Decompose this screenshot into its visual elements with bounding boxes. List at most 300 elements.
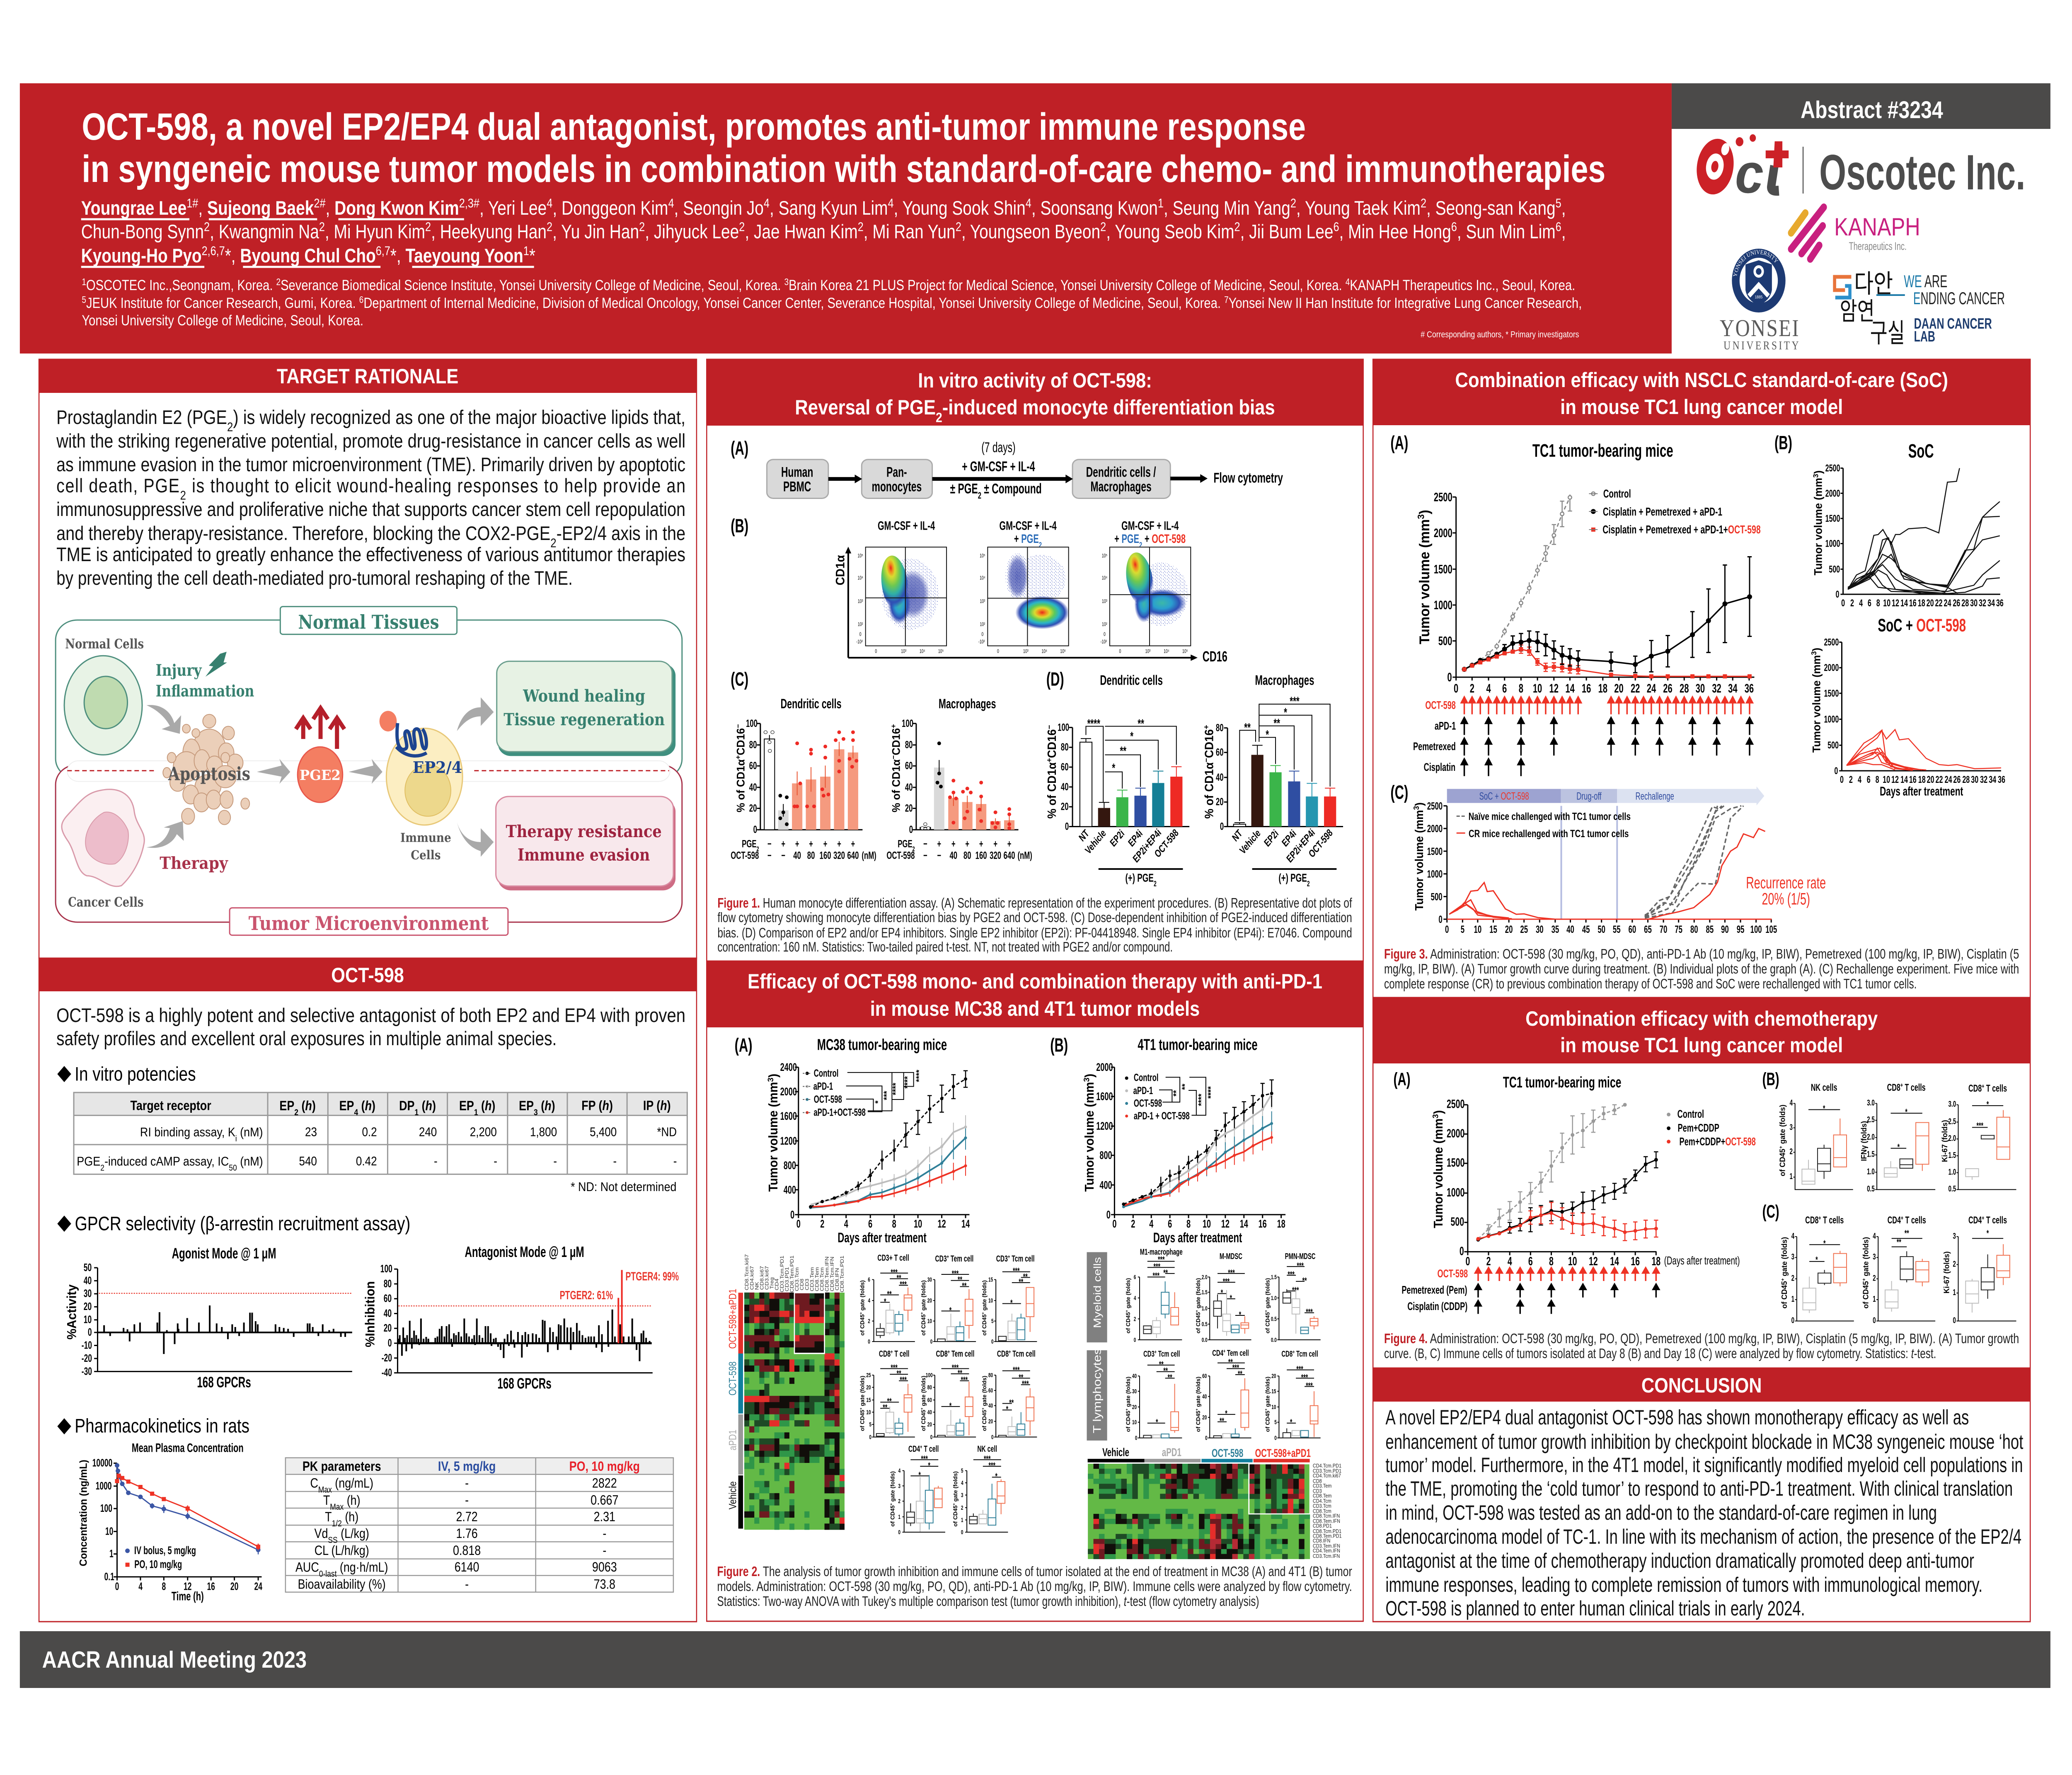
bar chart: inhibitor comparison macrophages: Macrophages bbox=[1255, 673, 1314, 688]
box plot: M-MDSC: of CD45+ gate (folds) bbox=[1195, 1278, 1201, 1333]
bar chart: inhibitor comparison macrophages: 80 bbox=[1216, 722, 1224, 734]
heatmap legend: 4T1 groups: OCT-598+aPD1 bbox=[1255, 1447, 1311, 1460]
heatmap labels: 4T1: CD8 bbox=[1313, 1478, 1322, 1484]
footer: AACR Annual Meeting 2023 bbox=[42, 1647, 307, 1673]
line chart: SoC individual: 36 bbox=[1996, 598, 2004, 609]
box plot: NK cells bbox=[1778, 1082, 1853, 1189]
timeline banner and rechallenge chart: Tumor volume (mm3) bbox=[1412, 802, 1426, 911]
flow cytometry plots: 10⁵ bbox=[938, 649, 944, 654]
bar chart: inhibitor comparison macrophages: Vehicle bbox=[1237, 827, 1263, 857]
table: PK parameters: 1.76 bbox=[456, 1526, 478, 1541]
caption: figure 1 bbox=[717, 896, 1352, 955]
timeline banner and rechallenge chart: 1500 bbox=[1427, 846, 1443, 857]
table: in vitro potencies: - bbox=[553, 1154, 557, 1169]
caption: figure 1: Figure 1. Human monocyte differentiation assay. (A) Schematic representation of the experiment procedures. (B) Representative dot plots of bbox=[717, 896, 1352, 911]
box plot: IFNγ CD8+ T cells: 2.5 bbox=[1867, 1115, 1875, 1124]
bar chart: inhibitor comparison dendritic cells bbox=[1045, 669, 1189, 888]
bar chart: inhibitor comparison macrophages: EP2i bbox=[1262, 827, 1280, 849]
arrows: dosing schedule: aPD-1 bbox=[1435, 719, 1456, 732]
header banner bbox=[20, 83, 1672, 354]
heading: target rationale: TARGET RATIONALE bbox=[277, 365, 458, 388]
text: therapy: Therapy bbox=[160, 853, 228, 873]
heatmap labels: 4T1: CD4.Tem.IFN bbox=[1313, 1547, 1340, 1554]
box plot: Ki-67 CD8+ T cells: 1.5 bbox=[1949, 1150, 1956, 1160]
schematic: experiment flow: Pan- bbox=[886, 465, 907, 480]
box plot: CD8+ Tcm cell: *** bbox=[1306, 1381, 1313, 1390]
schematic: experiment flow: + GM-CSF + IL-4 bbox=[962, 459, 1035, 475]
line chart: MC38 tumor volume: MC38 tumor-bearing mice bbox=[817, 1036, 947, 1053]
heatmap labels: 4T1: CD8.Tcm bbox=[1313, 1508, 1331, 1514]
flow cytometry plots: 10² bbox=[858, 622, 863, 627]
caption: figure 3: complete response (CR) to previous combination therapy of OCT-598 and SoC were rechallenged with TC1 tumor cells. bbox=[1384, 976, 1917, 992]
table: PK parameters: 73.8 bbox=[594, 1577, 615, 1592]
table: in vitro potencies: EP1 (h) bbox=[459, 1099, 495, 1117]
bar chart: agonist mode: %Activity bbox=[65, 1284, 79, 1339]
bar chart: antagonist mode: 40 bbox=[384, 1307, 392, 1319]
heading: efficacy bbox=[748, 970, 1322, 1020]
text: injury inflammation: Injury bbox=[156, 661, 202, 680]
line chart: SoC + OCT-598 individual: 8 bbox=[1876, 774, 1879, 785]
line chart: TC1 chemotherapy: 2000 bbox=[1447, 1127, 1464, 1140]
line chart: 4T1 tumor volume: 1200 bbox=[1096, 1120, 1113, 1132]
flow cytometry plots: + PGE2 + OCT-598 bbox=[1114, 532, 1186, 550]
box plot: CD8+ Tem cell: CD8+ Tem cell bbox=[936, 1349, 974, 1358]
line chart: MC38 tumor volume: Tumor volume (mm3) bbox=[766, 1074, 780, 1192]
box plot: CD3+ T cell: ** bbox=[897, 1273, 901, 1283]
timeline banner and rechallenge chart: 105 bbox=[1765, 924, 1777, 935]
heading: in vitro activity: In vitro activity of OCT-598: bbox=[918, 369, 1152, 392]
bar chart: antagonist mode: %Inhibition bbox=[363, 1281, 378, 1347]
line chart: TC1 tumor growth: 16 bbox=[1582, 682, 1591, 695]
flow cytometry plots: 10⁴ bbox=[1164, 649, 1169, 654]
heatmap labels: 4T1: CD8.Tem bbox=[1313, 1493, 1331, 1499]
box plot: CD4+ T cell: *** bbox=[921, 1454, 928, 1464]
box plot: NK cell: 0 bbox=[961, 1528, 963, 1535]
text block: rationale paragraph: TME is anticipated to greatly enhance the effectiveness of various antitumor therapies bbox=[56, 544, 685, 566]
heatmap labels: 4T1: CD8.Tem.PD1 bbox=[1313, 1533, 1342, 1539]
table: PK parameters: - bbox=[603, 1543, 606, 1558]
timeline banner and rechallenge chart: 20% (1/5) bbox=[1762, 890, 1810, 908]
box plot: CD8+ Tcm cell bbox=[981, 1349, 1037, 1441]
table: in vitro potencies: - bbox=[673, 1154, 677, 1169]
box plot: Ki-67 CD4+ T cells: * bbox=[1987, 1228, 1989, 1238]
heatmap labels: MC38: CD3.PD1 bbox=[784, 1267, 790, 1291]
box plot: PMN-MDSC: ** bbox=[1302, 1276, 1307, 1285]
timeline banner and rechallenge chart: 35 bbox=[1552, 924, 1559, 935]
flow cytometry plots: 10³ bbox=[1023, 649, 1029, 654]
line chart: TC1 chemotherapy: 1000 bbox=[1447, 1186, 1464, 1199]
box plot: CD8+ T cells: 3 bbox=[1791, 1252, 1794, 1262]
box plot: CD8+ T cells bbox=[1780, 1214, 1854, 1325]
line chart: TC1 tumor growth: (A) bbox=[1390, 433, 1408, 453]
label: T lymphocytes: T lymphocytes bbox=[1091, 1348, 1104, 1434]
box plot: CD3+ Tcm cell: 10 bbox=[988, 1297, 993, 1304]
box plot: PMN-MDSC: PMN-MDSC bbox=[1285, 1252, 1315, 1261]
box plot: CD8+ Tcm cell: ** bbox=[1019, 1373, 1023, 1382]
box plot: CD3+ Tem cell: CD3+ Tem cell bbox=[935, 1254, 973, 1264]
authors: Kyoung-Ho Pyo2,6,7*, Byoung Chul Cho6,7*, Taeyoung Yoon1* bbox=[81, 244, 535, 267]
box plot: M1-macrophage: 4 bbox=[1134, 1294, 1136, 1301]
line chart: TC1 chemotherapy: 0 bbox=[1465, 1255, 1470, 1268]
schematic: experiment flow: Human bbox=[781, 465, 813, 480]
box plot: PMN-MDSC: 0.0 bbox=[1271, 1336, 1277, 1343]
box plot: Ki-67 CD8+ T cells: 1.0 bbox=[1949, 1167, 1956, 1177]
line chart: 4T1 tumor volume: 14 bbox=[1240, 1217, 1248, 1230]
timeline banner and rechallenge chart: 90 bbox=[1721, 924, 1729, 935]
line chart: MC38 tumor volume: *** bbox=[882, 1091, 891, 1100]
box plot: CD3+ Tcm cell: 5 bbox=[991, 1317, 994, 1325]
line chart: TC1 tumor growth: 2 bbox=[1470, 682, 1474, 695]
line chart: mean plasma concentration: 24 bbox=[254, 1580, 262, 1593]
box plot: M1-macrophage: *** bbox=[1158, 1254, 1165, 1264]
dot plot: PGE2 + OCT-598 bbox=[1110, 547, 1191, 646]
box plot: CD3+ T cell: *** bbox=[900, 1279, 907, 1289]
line chart: MC38 tumor volume: (A) bbox=[735, 1035, 753, 1056]
line chart: SoC + OCT-598 individual: Days after treatment bbox=[1880, 784, 1963, 799]
line chart: TC1 tumor growth: 36 bbox=[1745, 682, 1754, 695]
bar chart: dose dependence macrophages: + bbox=[1007, 838, 1011, 850]
table: in vitro potencies: FP (h) bbox=[581, 1098, 613, 1113]
line chart: TC1 chemotherapy: Control bbox=[1677, 1108, 1704, 1120]
box plot: PMN-MDSC: *** bbox=[1297, 1261, 1304, 1271]
box plot: CD8+ T cell: *** bbox=[891, 1363, 898, 1373]
bar chart: antagonist mode bbox=[363, 1244, 679, 1392]
table: in vitro potencies: DP1 (h) bbox=[399, 1099, 436, 1117]
table: in vitro potencies: 2,200 bbox=[470, 1125, 497, 1139]
box plot: CD8+ T cells: 2 bbox=[1791, 1274, 1794, 1283]
box plot: NK cell: 4 bbox=[961, 1479, 963, 1487]
line chart: mean plasma concentration: 8 bbox=[162, 1580, 166, 1593]
schematic: experiment flow: monocytes bbox=[872, 479, 922, 495]
heatmap labels: MC38: aPD1 bbox=[727, 1430, 738, 1451]
line chart: MC38 tumor volume: 0 bbox=[790, 1208, 794, 1221]
line chart: mean plasma concentration: 16 bbox=[207, 1580, 215, 1593]
box plot: CD8+ Tem cell bbox=[920, 1349, 976, 1441]
bar chart: inhibitor comparison macrophages: 0 bbox=[1220, 821, 1224, 832]
bar chart: dose dependence dendritic cells: − bbox=[767, 838, 772, 850]
caption: figure 2: Statistics: Two-way ANOVA with Tukey's multiple comparison test (tumor growth inhibition), t-test (flow cytometry analysis) bbox=[717, 1594, 1259, 1609]
box plot: CD8+ Tcm cell: 10 bbox=[1271, 1403, 1276, 1410]
line chart: SoC + OCT-598 individual: 22 bbox=[1936, 774, 1943, 785]
line chart: SoC individual: 26 bbox=[1953, 598, 1960, 609]
text block: conclusion: in mind, OCT-598 was tested as an add-on to the standard-of-care regimen in lung bbox=[1385, 1501, 1937, 1524]
line chart: SoC + OCT-598 individual: 34 bbox=[1989, 774, 1997, 785]
heatmap labels: 4T1 bbox=[1313, 1463, 1342, 1559]
box plot: CD3+ T cell: of CD45+ gate (folds) bbox=[859, 1280, 866, 1336]
box plot: CD8+ Tem cell: *** bbox=[952, 1363, 959, 1373]
box plot: Ki-67 CD4+ T cells: 3 bbox=[1953, 1231, 1956, 1241]
box plot: CD8+ T cell: 15 bbox=[866, 1396, 871, 1404]
line chart: SoC individual: 28 bbox=[1961, 598, 1969, 609]
line chart: 4T1 tumor volume: 4 bbox=[1149, 1217, 1153, 1230]
schematic: experiment flow: Flow cytometry bbox=[1213, 470, 1283, 486]
line chart: SoC individual: 6 bbox=[1868, 598, 1871, 609]
timeline banner and rechallenge chart: 10 bbox=[1474, 924, 1481, 935]
bar chart: agonist mode: 30 bbox=[84, 1287, 92, 1300]
text block: rationale paragraph: immunosuppressive and proliferative niche that supports cancer stem cell repopulation bbox=[56, 499, 685, 521]
heatmap labels: 4T1: CD3.Tem bbox=[1313, 1482, 1331, 1489]
timeline banner and rechallenge chart: CR mice rechallenged with TC1 tumor cells bbox=[1469, 828, 1629, 840]
text block: conclusion: A novel EP2/EP4 dual antagonist OCT-598 has shown monotherapy efficacy as well as bbox=[1385, 1406, 1969, 1429]
text block: rationale paragraph: with the striking regenerative potential, promote drug-resistance in cancer cells as well bbox=[56, 431, 685, 452]
line chart: mean plasma concentration: 10 bbox=[105, 1525, 113, 1537]
box plot: CD8+ T cell: ** bbox=[887, 1396, 892, 1406]
box plot: Ki-67 CD4+ T cells bbox=[1942, 1214, 2016, 1325]
line chart: SoC individual: 0 bbox=[1836, 589, 1840, 600]
heatmap labels: 4T1: CD8.Tcm.PD1 bbox=[1313, 1528, 1341, 1534]
timeline banner and rechallenge chart: 2000 bbox=[1427, 823, 1443, 835]
box plot: CD3+ Tcm cell bbox=[981, 1254, 1037, 1345]
icon: immune cell with EP2/4 receptor: Cells bbox=[411, 848, 441, 862]
heatmap labels: MC38: OCT-598+aPD1 bbox=[727, 1289, 738, 1349]
line chart: SoC individual: 24 bbox=[1944, 598, 1951, 609]
box plot: Ki-67 CD8+ T cells: 2.0 bbox=[1949, 1133, 1956, 1143]
box plot: CD8+ Tcm cell: 5 bbox=[1274, 1419, 1277, 1426]
box plot: CD8+ Tcm cell: *** bbox=[1296, 1364, 1303, 1374]
box plot: M-MDSC: 1.5 bbox=[1202, 1288, 1208, 1296]
box plot: CD3+ Tcm cell: CD3+ Tcm cell bbox=[1143, 1349, 1180, 1358]
box plot: M1-macrophage: 2 bbox=[1134, 1315, 1136, 1322]
heatmap labels: MC38: Vehicle bbox=[727, 1481, 738, 1509]
line chart: MC38 tumor volume: 8 bbox=[892, 1217, 896, 1230]
text block: conclusion: immune responses, leading to complete remission of tumors with immunological memory. bbox=[1385, 1573, 1982, 1596]
bar chart: inhibitor comparison macrophages: 40 bbox=[1216, 772, 1224, 783]
bar chart: dose dependence macrophages: 40 bbox=[949, 850, 957, 861]
box: wound healing bbox=[497, 661, 675, 756]
heatmap labels: 4T1: CD4.Tcm bbox=[1313, 1498, 1331, 1504]
heatmap labels: 4T1: CD4.Tcm.ki67 bbox=[1313, 1472, 1341, 1479]
panel: conclusion bbox=[1373, 1368, 2030, 1622]
line chart: 4T1 tumor volume: **** bbox=[1206, 1086, 1216, 1099]
authors bbox=[81, 196, 1566, 267]
line chart: TC1 chemotherapy: Pem+CDDP bbox=[1678, 1121, 1719, 1134]
bar chart: dose dependence macrophages: 40 bbox=[905, 782, 913, 793]
panel: target rationale bbox=[39, 359, 697, 958]
box plot: CD3+ Tem cell: ** bbox=[958, 1275, 962, 1284]
line chart: TC1 chemotherapy: (A) bbox=[1394, 1069, 1411, 1089]
box plot: NK cells: 3 bbox=[1790, 1123, 1793, 1132]
line chart: TC1 tumor growth: 22 bbox=[1631, 682, 1640, 695]
bar chart: inhibitor comparison macrophages: *** bbox=[1290, 695, 1300, 708]
logo: Daan Cancer Lab: DAAN CANCER bbox=[1914, 316, 1992, 332]
box plot: CD8+ Tcm cell: CD8+ Tcm cell bbox=[1281, 1349, 1318, 1358]
panel: efficacy MC38 and 4T1 bbox=[707, 961, 1363, 1621]
box plot: Ki-67 CD4+ T cells: CD4+ T cells bbox=[1968, 1214, 2007, 1226]
text block: rationale paragraph bbox=[56, 407, 685, 589]
logo: Yonsei: 1885 bbox=[1755, 295, 1762, 299]
line chart: SoC + OCT-598 individual: 18 bbox=[1918, 774, 1926, 785]
box plot: M1-macrophage: M1-macrophage bbox=[1140, 1247, 1183, 1257]
table: PK parameters: - bbox=[603, 1526, 606, 1541]
line chart: MC38 tumor volume: 800 bbox=[784, 1159, 796, 1172]
dot plot: GM-CSF + IL-4 bbox=[866, 547, 946, 646]
line chart: SoC individual: 500 bbox=[1829, 564, 1840, 575]
bar chart: inhibitor comparison dendritic cells: 40 bbox=[1061, 781, 1069, 793]
box plot: CD4+ T cells: of CD45+ gate (folds) bbox=[1861, 1237, 1870, 1308]
line chart: SoC individual: 34 bbox=[1987, 598, 1995, 609]
line chart: MC38 tumor volume: aPD-1 bbox=[813, 1080, 833, 1092]
line chart: 4T1 tumor volume: 2 bbox=[1131, 1217, 1135, 1230]
flow cytometry plots: GM-CSF + IL-4 bbox=[878, 519, 935, 533]
line chart: SoC + OCT-598 individual: 36 bbox=[1998, 774, 2005, 785]
line chart: TC1 tumor growth: 20 bbox=[1614, 682, 1624, 695]
bar chart: antagonist mode: -20 bbox=[382, 1351, 392, 1364]
line chart: TC1 tumor growth: Control bbox=[1603, 487, 1631, 500]
bar chart: inhibitor comparison dendritic cells: OCT-598 bbox=[1152, 826, 1181, 860]
bar chart: dose dependence dendritic cells: + bbox=[795, 838, 799, 850]
bar chart: inhibitor comparison dendritic cells: 0 bbox=[1065, 821, 1069, 832]
figure 1 charts bbox=[731, 438, 1343, 888]
timeline banner and rechallenge chart: 25 bbox=[1520, 924, 1528, 935]
line chart: SoC + OCT-598 individual: 16 bbox=[1909, 774, 1917, 785]
logo: Yonsei: UNIVERSITY bbox=[1723, 339, 1799, 352]
box plot: CD4+ T cells: 0 bbox=[1873, 1316, 1876, 1325]
heatmap labels: MC38: CD8.Tem.IFN bbox=[824, 1257, 830, 1291]
abstract number bbox=[1672, 83, 2050, 129]
box plot: CD8+ Tcm cell: ** bbox=[1009, 1398, 1014, 1407]
timeline banner and rechallenge chart: (C) bbox=[1390, 782, 1408, 803]
bar chart: inhibitor comparison dendritic cells: ** bbox=[1120, 744, 1126, 758]
bar chart: dose dependence macrophages: − bbox=[937, 850, 941, 861]
logo: Daan Cancer Lab: WE ARE bbox=[1904, 272, 1947, 291]
bar chart: agonist mode bbox=[65, 1245, 352, 1391]
bar chart: agonist mode: -30 bbox=[82, 1365, 92, 1377]
panel: NSCLC standard of care bbox=[1373, 359, 2030, 998]
box plot: CD3+ Tcm cell: 0 bbox=[1135, 1434, 1137, 1441]
box plot: NK cells: 1 bbox=[1790, 1172, 1793, 1181]
logo: Yonsei bbox=[1720, 249, 1799, 352]
logo: Oscotec: c bbox=[1735, 143, 1764, 205]
box plot: CD8+ Tem cell: 100 bbox=[926, 1371, 933, 1379]
line chart: SoC individual: 2000 bbox=[1825, 488, 1840, 499]
box plot: M1-macrophage: of CD45+ gate (folds) bbox=[1125, 1278, 1131, 1333]
table: PK parameters: 0.818 bbox=[453, 1543, 481, 1558]
affiliations: Yonsei University College of Medicine, Seoul, Korea. bbox=[82, 312, 363, 329]
line chart: SoC individual: 0 bbox=[1841, 598, 1845, 609]
flow cytometry plots: 10³ bbox=[980, 599, 985, 605]
arrows: chemo dosing schedule: Cisplatin (CDDP) bbox=[1407, 1300, 1467, 1312]
box plot: M-MDSC: M-MDSC bbox=[1220, 1252, 1242, 1261]
table: PK parameters: IV, 5 mg/kg bbox=[438, 1459, 496, 1474]
bar chart: dose dependence dendritic cells: + bbox=[837, 838, 841, 850]
box plot: CD4+ T cells: ** bbox=[1905, 1228, 1909, 1238]
flow cytometry plots: 10³ bbox=[858, 599, 863, 605]
subheading: in vitro potencies: In vitro potencies bbox=[75, 1064, 196, 1085]
heading: in vitro activity: Reversal of PGE 2-induced monocyte differentiation bias bbox=[795, 396, 1275, 425]
icon: normal cell: Normal Cells bbox=[65, 636, 144, 651]
bar chart: inhibitor comparison macrophages: 60 bbox=[1216, 746, 1224, 758]
logo: Kanaph: Therapeutics Inc. bbox=[1849, 240, 1907, 252]
box plot: CD8+ Tem cell: ** bbox=[958, 1368, 962, 1378]
caption: figure 1: bias. (D) Comparison of EP2 and/or EP4 inhibitors. Single EP2 inhibitor (EP2i): PF-04418948. Single EP4 inhibitor (EP4i): E7046. Compound bbox=[717, 925, 1352, 941]
box plot: M-MDSC: 2.0 bbox=[1202, 1273, 1208, 1281]
line chart: MC38 tumor volume: 0 bbox=[796, 1217, 801, 1230]
table: in vitro potencies: RI binding assay, K i (nM) bbox=[140, 1125, 263, 1143]
line chart: mean plasma concentration bbox=[78, 1441, 262, 1603]
box plot: CD3+ Tem cell: of CD45+ gate (folds) bbox=[920, 1280, 927, 1336]
box plot: M-MDSC bbox=[1195, 1252, 1251, 1343]
box plot: CD3+ Tcm cell: CD3+ Tcm cell bbox=[996, 1254, 1035, 1264]
bar chart: dose dependence macrophages: Macrophages bbox=[939, 696, 996, 711]
panel: chemotherapy combination bbox=[1373, 998, 2030, 1368]
heatmap labels: 4T1: CD8.Tem.IFN bbox=[1313, 1518, 1340, 1524]
timeline banner and rechallenge chart: Drug-off bbox=[1576, 790, 1602, 802]
line chart: MC38 tumor volume: 4 bbox=[844, 1217, 848, 1230]
line chart: mean plasma concentration: 20 bbox=[230, 1580, 238, 1593]
heading: combination efficacy SoC: in mouse TC1 lung cancer model bbox=[1560, 395, 1843, 419]
bar chart: antagonist mode: 168 GPCRs bbox=[497, 1375, 552, 1392]
bar chart: antagonist mode: Antagonist Mode @ 1 μM bbox=[465, 1244, 584, 1260]
heading: OCT-598: OCT-598 bbox=[331, 964, 404, 987]
line chart: MC38 tumor volume: Days after treatment bbox=[838, 1230, 927, 1245]
flow cytometry plots: 10³ bbox=[901, 649, 906, 654]
timeline banner and rechallenge chart: 20 bbox=[1505, 924, 1513, 935]
line chart: mean plasma concentration: 0 bbox=[115, 1580, 119, 1593]
label: normal tissues: Normal Tissues bbox=[298, 611, 439, 634]
timeline banner and rechallenge chart: Naïve mice challenged with TC1 tumor cells bbox=[1469, 811, 1631, 822]
box plot: NK cell: *** bbox=[984, 1454, 991, 1464]
line chart: SoC individual: 10 bbox=[1883, 598, 1890, 609]
timeline banner and rechallenge chart: 100 bbox=[1750, 924, 1762, 935]
table: in vitro potencies: * ND: Not determined bbox=[571, 1180, 676, 1194]
box plot: CD3+ Tem cell: 10 bbox=[927, 1317, 932, 1325]
box plot: CD4+ T cell: 4 bbox=[898, 1467, 901, 1474]
table: PK parameters: AUC0-last (ng·h/mL) bbox=[295, 1560, 388, 1579]
flow cytometry plots: -10² bbox=[1101, 639, 1107, 645]
line chart: SoC individual: Tumor volume (mm3) bbox=[1811, 470, 1825, 575]
box plot: CD8+ T cell bbox=[859, 1349, 915, 1441]
schematic: experiment flow: Dendritic cells / bbox=[1086, 465, 1156, 480]
text block: conclusion: OCT-598 is planned to enter human clinical trials in early 2024. bbox=[1385, 1597, 1805, 1620]
box plot: Ki-67 CD8+ T cells bbox=[1941, 1082, 2016, 1194]
logo: Daan Cancer Lab: ENDING CANCER bbox=[1913, 289, 2005, 308]
line chart: SoC + OCT-598 individual: 30 bbox=[1971, 774, 1978, 785]
bar chart: inhibitor comparison dendritic cells: (+) PGE2 bbox=[1126, 872, 1157, 888]
bar chart: dose dependence macrophages: 80 bbox=[963, 850, 971, 861]
table: PK parameters: Bioavailability (%) bbox=[298, 1577, 386, 1592]
bar chart: dose dependence macrophages: 80 bbox=[905, 739, 913, 751]
line chart: SoC + OCT-598 individual: 2500 bbox=[1824, 637, 1839, 648]
line chart: TC1 chemotherapy: 2 bbox=[1486, 1255, 1491, 1268]
box plot: CD8+ T cell: *** bbox=[900, 1375, 907, 1385]
diagram: PGE2 axis bbox=[56, 607, 682, 935]
icon: apoptosis cluster: Apoptosis bbox=[168, 763, 250, 785]
timeline banner and rechallenge chart: 75 bbox=[1675, 924, 1682, 935]
line chart: SoC + OCT-598 individual: 24 bbox=[1945, 774, 1952, 785]
box plot: IFNγ CD8+ T cells: CD8+ T cells bbox=[1887, 1081, 1926, 1093]
flow cytometry plots: 10³ bbox=[1102, 599, 1107, 605]
bar chart: inhibitor comparison macrophages: ** bbox=[1273, 717, 1280, 730]
text block: OCT-598 intro: safety profiles and excellent oral exposures in multiple animal species. bbox=[56, 1028, 557, 1050]
box plot: CD4+ T cell: * bbox=[919, 1470, 921, 1480]
line chart: 4T1 tumor volume: 0 bbox=[1112, 1217, 1116, 1230]
heatmap labels: MC38: CD3.Tem bbox=[809, 1267, 815, 1291]
flow cytometry plots: 10⁵ bbox=[1102, 553, 1107, 559]
box plot: CD3+ T cell: 0 bbox=[868, 1338, 870, 1345]
box plot: IFNγ CD8+ T cells: IFNγ (folds) bbox=[1860, 1121, 1868, 1161]
bar chart: inhibitor comparison dendritic cells: % of CD1α+CD16− bbox=[1045, 725, 1058, 818]
timeline banner and rechallenge chart: 50 bbox=[1598, 924, 1605, 935]
line chart: MC38 tumor volume bbox=[735, 1035, 970, 1245]
table: PK parameters bbox=[286, 1458, 673, 1592]
box plot: CD8+ Tem cell: 80 bbox=[927, 1383, 932, 1391]
box plot: CD3+ Tcm cell: * bbox=[1156, 1417, 1158, 1427]
box plot: NK cell: * bbox=[995, 1471, 997, 1481]
line chart: SoC + OCT-598 individual bbox=[1810, 615, 2005, 799]
box plot: Ki-67 CD8+ T cells: Ki-67 (folds) bbox=[1941, 1120, 1949, 1162]
box plot: CD4+ Tem cell: ** bbox=[1238, 1369, 1242, 1379]
table: PK parameters: - bbox=[465, 1476, 469, 1491]
